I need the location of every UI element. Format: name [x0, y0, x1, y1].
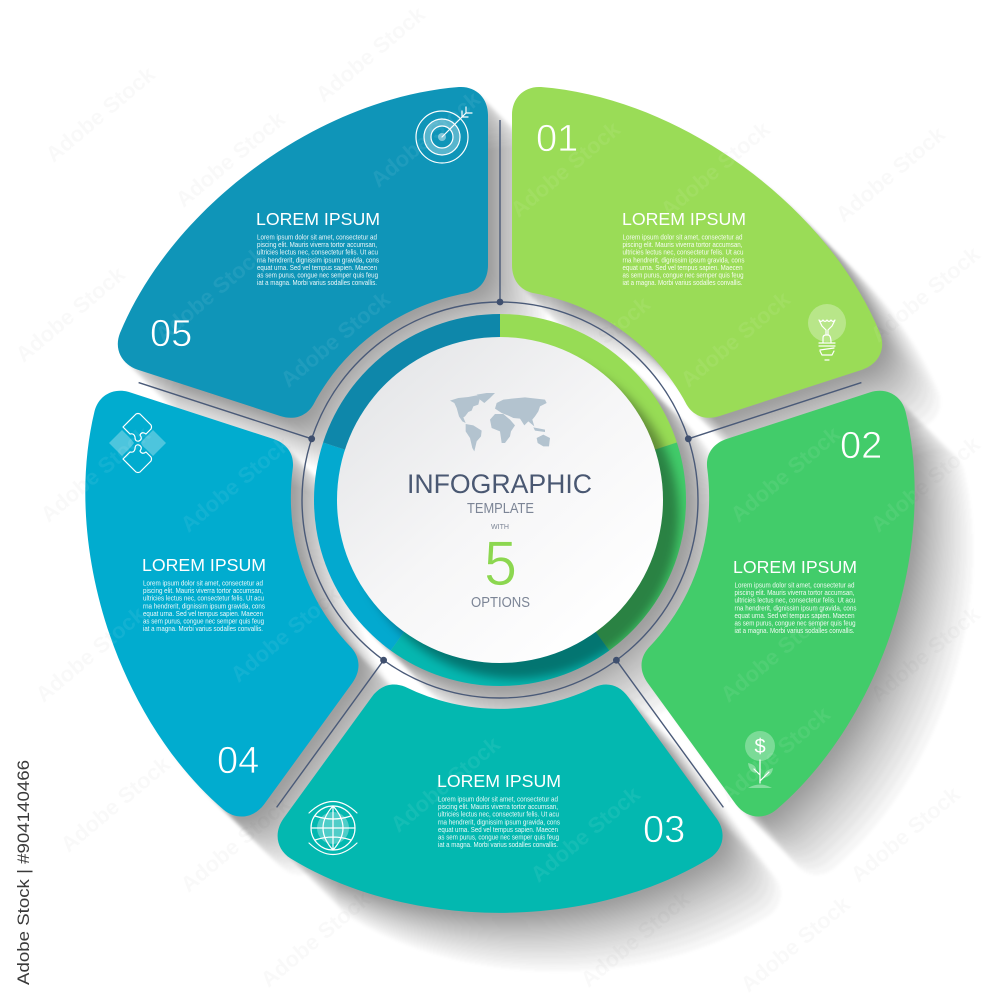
- body text 01: ultricies lectus nec, consectetur felis. Ut acu: [622, 249, 744, 257]
- body text 03: as sem purus, congue nec semper quis feug: [438, 834, 559, 842]
- stock credit vertical text: Adobe Stock | #904140466: [15, 760, 33, 985]
- body text 01: equat urna. Sed vel tempus sapien. Maecen: [622, 264, 743, 272]
- body text 03: equat urna. Sed vel tempus sapien. Maecen: [438, 826, 558, 834]
- segment shape 01: [512, 87, 882, 418]
- body text 01: as sem purus, congue nec semper quis feug: [622, 272, 744, 280]
- body text 05: equat urna. Sed vel tempus sapien. Maecen: [257, 264, 377, 272]
- number five: 5: [484, 529, 517, 599]
- body text 03: [438, 796, 560, 849]
- body text 03: iat a magna. Morbi varius sodalles convallis.: [438, 841, 558, 849]
- options label: OPTIONS: [471, 595, 530, 611]
- body text 03: piscing elit. Mauris viverra tortor accumsan,: [438, 803, 558, 811]
- body text 02: Lorem ipsum dolor sit amet, consectetur ad: [734, 582, 855, 590]
- long shadow beneath segments: [88, 90, 973, 971]
- number 05: 05: [150, 313, 192, 355]
- icon: puzzle: [109, 414, 166, 472]
- body text 01: iat a magna. Morbi varius sodalles convallis.: [622, 279, 743, 287]
- body text 05: iat a magna. Morbi varius sodalles convallis.: [257, 279, 377, 287]
- heading 05: LOREM IPSUM: [256, 209, 380, 229]
- segment shape 02: [642, 391, 915, 817]
- number 04: 04: [217, 740, 259, 782]
- body text 03: rna hendrerit, dignissim ipsum gravida, cons: [438, 818, 560, 826]
- body text 04: rna hendrerit, dignissim ipsum gravida, cons: [143, 602, 265, 610]
- body text 04: [143, 580, 265, 633]
- body text 04: as sem purus, congue nec semper quis feug: [143, 618, 264, 626]
- body text 02: as sem purus, congue nec semper quis feug: [734, 620, 856, 628]
- body text 02: rna hendrerit, dignissim ipsum gravida, cons: [734, 604, 857, 612]
- coloured ring: [314, 314, 686, 686]
- body text 01: Lorem ipsum dolor sit amet, consectetur ad: [622, 234, 743, 242]
- heading 01: LOREM IPSUM: [622, 209, 746, 229]
- body text 04: equat urna. Sed vel tempus sapien. Maecen: [143, 610, 263, 618]
- body text 05: Lorem ipsum dolor sit amet, consectetur ad: [257, 234, 377, 242]
- body text 03: Lorem ipsum dolor sit amet, consectetur ad: [438, 796, 558, 804]
- number 02: 02: [840, 425, 882, 467]
- body text 02: equat urna. Sed vel tempus sapien. Maecen: [734, 612, 855, 620]
- body text 02: piscing elit. Mauris viverra tortor accumsan,: [734, 589, 855, 597]
- body text 03: ultricies lectus nec, consectetur felis. Ut acu: [438, 811, 559, 819]
- with label: WITH: [491, 522, 509, 531]
- body text 04: ultricies lectus nec, consectetur felis. Ut acu: [143, 595, 264, 603]
- number 03: 03: [643, 809, 685, 851]
- body text 05: [257, 234, 379, 287]
- body text 04: iat a magna. Morbi varius sodalles convallis.: [143, 625, 263, 633]
- body text 05: rna hendrerit, dignissim ipsum gravida, cons: [257, 256, 379, 264]
- body text 02: [734, 582, 857, 635]
- panel: 05: [118, 87, 488, 418]
- segment shape 04: [85, 391, 358, 817]
- body text 04: piscing elit. Mauris viverra tortor accumsan,: [143, 587, 263, 595]
- icon: light bulb: [808, 304, 846, 360]
- center subtitle: TEMPLATE: [467, 500, 534, 517]
- body text 04: Lorem ipsum dolor sit amet, consectetur ad: [143, 580, 263, 588]
- heading 02: LOREM IPSUM: [733, 557, 857, 577]
- body text 01: [622, 234, 745, 287]
- panel: 03: [278, 685, 723, 913]
- heading 03: LOREM IPSUM: [437, 771, 561, 791]
- center circle: [337, 337, 663, 663]
- body text 02: ultricies lectus nec, consectetur felis. Ut acu: [734, 597, 856, 605]
- body text 05: piscing elit. Mauris viverra tortor accumsan,: [257, 241, 377, 249]
- connector lines and ring line: [139, 120, 861, 807]
- heading 04: LOREM IPSUM: [142, 555, 266, 575]
- icon: globe: [309, 802, 357, 854]
- center title: INFOGRAPHIC: [407, 469, 592, 499]
- body text 01: piscing elit. Mauris viverra tortor accumsan,: [622, 241, 743, 249]
- body text 02: iat a magna. Morbi varius sodalles convallis.: [734, 627, 855, 635]
- segment shape 05: [118, 87, 488, 418]
- panel: 04: [85, 391, 358, 817]
- icon: money plant: [745, 731, 775, 788]
- panel: 02: [642, 391, 915, 817]
- icon: target: [416, 107, 472, 163]
- foreground watermark over panels: [86, 94, 914, 882]
- body text 05: as sem purus, congue nec semper quis feug: [257, 272, 378, 280]
- world map: [450, 393, 550, 451]
- number 01: 01: [536, 118, 578, 160]
- body text 01: rna hendrerit, dignissim ipsum gravida, cons: [622, 256, 745, 264]
- segment shape 03: [278, 685, 723, 913]
- body text 05: ultricies lectus nec, consectetur felis. Ut acu: [257, 249, 378, 257]
- panel: 01: [512, 87, 882, 418]
- icon: money plant: $: [754, 736, 766, 758]
